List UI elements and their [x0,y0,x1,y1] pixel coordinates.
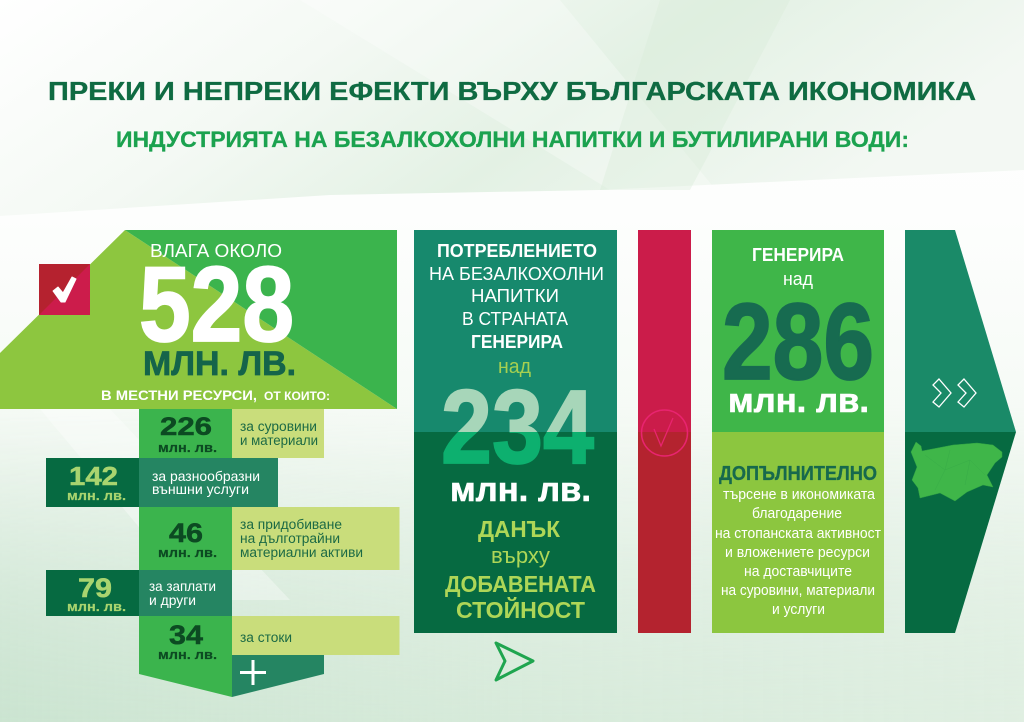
tax text [445,516,596,623]
figure 234: 234 [441,369,594,486]
row 226: за суровини [240,419,317,434]
row 79 [46,570,232,616]
row 46: материални активи [240,545,363,560]
panel: red divider [638,230,691,633]
additional text: на суровини, материали [721,583,875,599]
row 79: за заплати [149,578,216,594]
row 46: 46 [169,518,203,548]
subtitle: ИНДУСТРИЯТА НА БЕЗАЛКОХОЛНИ НАПИТКИ И БУТИЛИРАНИ ВОДИ: [116,127,909,152]
row 226: 226 [160,413,212,441]
resources caption end: ОТ КОИТО: [264,391,330,403]
row 34: 34 [169,620,203,650]
panel: arrow with map [905,230,1016,633]
additional text: благодарение [752,506,842,522]
unit: МЛН. ЛВ. [143,345,296,383]
row 34: млн. лв. [158,647,217,662]
row 46: млн. лв. [158,545,217,560]
additional text: на стопанската активност [715,526,881,542]
figure 528: 528 [139,244,294,364]
tax text: върху [491,543,550,568]
intro label: ВЛАГА ОКОЛО [150,241,282,261]
over label: над [783,269,813,289]
icon: map of Bulgaria [911,442,1002,501]
additional heading: ДОПЪЛНИТЕЛНО [719,463,877,485]
row 226 [139,409,324,458]
unit: млн. лв. [450,471,591,509]
over label: над [498,356,531,378]
consumption text: НА БЕЗАЛКОХОЛНИ [429,264,604,284]
header shape lime [0,230,397,409]
row 142: за разнообразни [152,468,260,484]
consumption text: ПОТРЕБЛЕНИЕТО [437,241,597,261]
additional text: и вложениете ресурси [725,545,870,561]
additional text: и услуги [772,602,825,618]
row 46: за придобиване [240,517,342,532]
figure 234 [443,388,594,465]
additional text: на доставчиците [744,564,852,580]
tax text: ДОБАВЕНАТА [445,571,596,597]
consumption text: ГЕНЕРИРА [471,332,563,352]
row 34: за стоки [240,630,292,645]
icon: plus [232,655,324,697]
row 142: млн. лв. [67,488,126,503]
consumption text: НАПИТКИ [471,286,559,306]
row 142: 142 [69,461,118,491]
row 142 [46,458,278,507]
row 46 [139,507,400,570]
panel: consumption tax [414,230,617,633]
icon: check box [39,264,90,315]
unit: млн. лв. [728,382,869,420]
resources caption: В МЕСТНИ РЕСУРСИ, [101,387,257,403]
header shape green [125,230,397,409]
row 79: и други [149,592,196,608]
tax text: СТОЙНОСТ [456,596,585,623]
icon: outline arrow [496,643,533,680]
tax text: ДАНЪК [478,516,561,542]
consumption text [429,241,604,352]
title: ПРЕКИ И НЕПРЕКИ ЕФЕКТИ ВЪРХУ БЪЛГАРСКАТА ИКОНОМИКА [48,76,976,106]
row 79: млн. лв. [67,599,126,614]
generates label: ГЕНЕРИРА [752,245,844,265]
figure 234: 234 [441,369,594,486]
row 142: външни услуги [152,481,249,497]
row 226: и материали [240,433,318,448]
icon: double chevron [933,379,976,407]
icon: circled check [642,410,688,456]
row 226: млн. лв. [158,440,217,455]
panel: local resources [0,230,400,697]
additional text: търсене в икономиката [723,487,876,503]
row 79: 79 [78,573,112,603]
figure 286: 286 [722,281,874,403]
panel: generates [712,230,884,633]
row 34 [139,616,400,697]
row 46: на дълготрайни [240,531,340,546]
consumption text: В СТРАНАТА [462,309,568,329]
additional text [715,487,881,618]
